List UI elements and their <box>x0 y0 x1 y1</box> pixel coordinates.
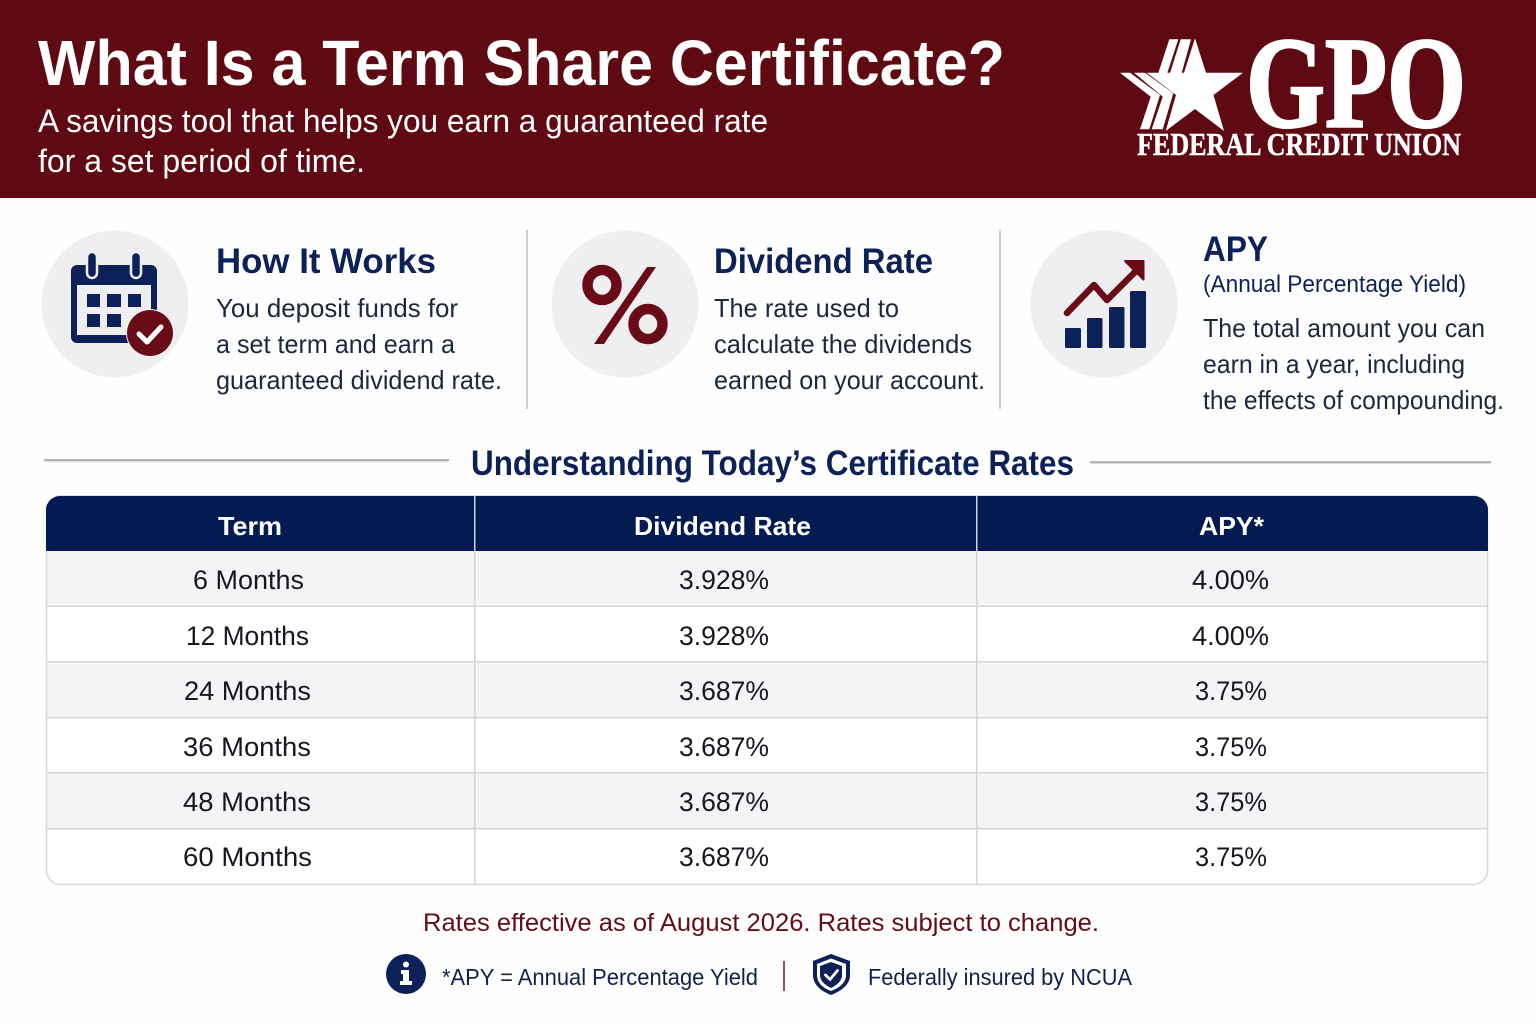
row: 36 months: 3.687% <box>679 732 769 762</box>
title: What Is a Term Share Certificate? <box>38 27 1005 99</box>
row: 60 months: 3.75% <box>1195 842 1267 872</box>
table header: Dividend Rate <box>634 511 811 541</box>
logo: GPO Federal Credit Union <box>1120 12 1466 162</box>
heading: how it works: How It Works <box>216 242 436 281</box>
heading: APY: APY <box>1203 230 1268 269</box>
icon: shield <box>813 954 850 995</box>
row: 60 months <box>183 842 1267 872</box>
text: dividend rate: earned on your account. <box>714 365 985 395</box>
text: APY <box>1203 313 1504 415</box>
table header <box>46 496 1488 551</box>
text: dividend rate <box>714 293 985 395</box>
panel: dividend rate <box>552 230 985 395</box>
row: 12 months: 12 Months <box>186 621 309 651</box>
icon: percent <box>552 230 698 378</box>
icon: calendar with check <box>42 230 188 378</box>
subheading: annual percentage yield: (Annual Percentage Yield) <box>1203 271 1466 298</box>
heading: dividend rate: Dividend Rate <box>714 242 933 281</box>
row: 60 months: 60 Months <box>183 842 312 872</box>
row: 12 months: 3.928% <box>679 621 769 651</box>
header panel <box>0 0 1536 198</box>
text: how it works <box>216 293 502 395</box>
text: dividend rate: calculate the dividends <box>714 329 972 359</box>
table header: APY* <box>1199 511 1265 541</box>
row: 24 months: 3.75% <box>1195 676 1267 706</box>
row: 12 months <box>186 621 1269 651</box>
subtitle <box>38 103 768 179</box>
icon: growth chart <box>1030 230 1178 378</box>
text: how it works: guaranteed dividend rate. <box>216 365 502 395</box>
icon: info <box>386 954 426 994</box>
row: 48 months: 3.75% <box>1195 787 1267 817</box>
text: APY: earn in a year, including <box>1203 349 1465 379</box>
panel: how it works <box>42 230 502 395</box>
footer <box>386 954 1133 995</box>
row: 24 months: 24 Months <box>184 676 311 706</box>
row: 36 months: 3.75% <box>1195 732 1267 762</box>
panel: APY <box>1030 230 1504 415</box>
row: 6 months: 6 Months <box>193 565 304 595</box>
rates table <box>46 496 1488 884</box>
text: how it works: a set term and earn a <box>216 329 456 359</box>
footnote: APY: *APY = Annual Percentage Yield <box>442 964 758 990</box>
row: 6 months: 4.00% <box>1192 565 1269 595</box>
row: 12 months: 4.00% <box>1192 621 1269 651</box>
row: 48 months: 48 Months <box>183 787 311 817</box>
footnote: NCUA: Federally insured by NCUA <box>868 964 1133 990</box>
row: 6 months: 3.928% <box>679 565 769 595</box>
text: how it works: You deposit funds for <box>216 293 458 323</box>
row: 6 months <box>193 565 1269 595</box>
row: 36 months <box>183 732 1267 762</box>
subtitle: A savings tool that helps you earn a guaranteed rate <box>38 103 768 139</box>
table header: Term <box>218 511 282 541</box>
rates note: Rates effective as of August 2026. Rates subject to change. <box>423 909 1099 937</box>
text: APY: the effects of compounding. <box>1203 385 1504 415</box>
row: 24 months <box>184 676 1267 706</box>
subtitle: for a set period of time. <box>38 143 365 179</box>
row: 60 months: 3.687% <box>679 842 769 872</box>
section heading: Understanding Today’s Certificate Rates <box>471 444 1074 483</box>
row: 24 months: 3.687% <box>679 676 769 706</box>
logo: GPO Federal Credit Union: GPO <box>1246 12 1466 156</box>
row: 36 months: 36 Months <box>183 732 311 762</box>
text: dividend rate: The rate used to <box>714 293 899 323</box>
text: APY: The total amount you can <box>1203 313 1485 343</box>
logo: GPO Federal Credit Union: FEDERAL CREDIT UNION <box>1137 126 1461 162</box>
row: 48 months: 3.687% <box>679 787 769 817</box>
row: 48 months <box>183 787 1267 817</box>
